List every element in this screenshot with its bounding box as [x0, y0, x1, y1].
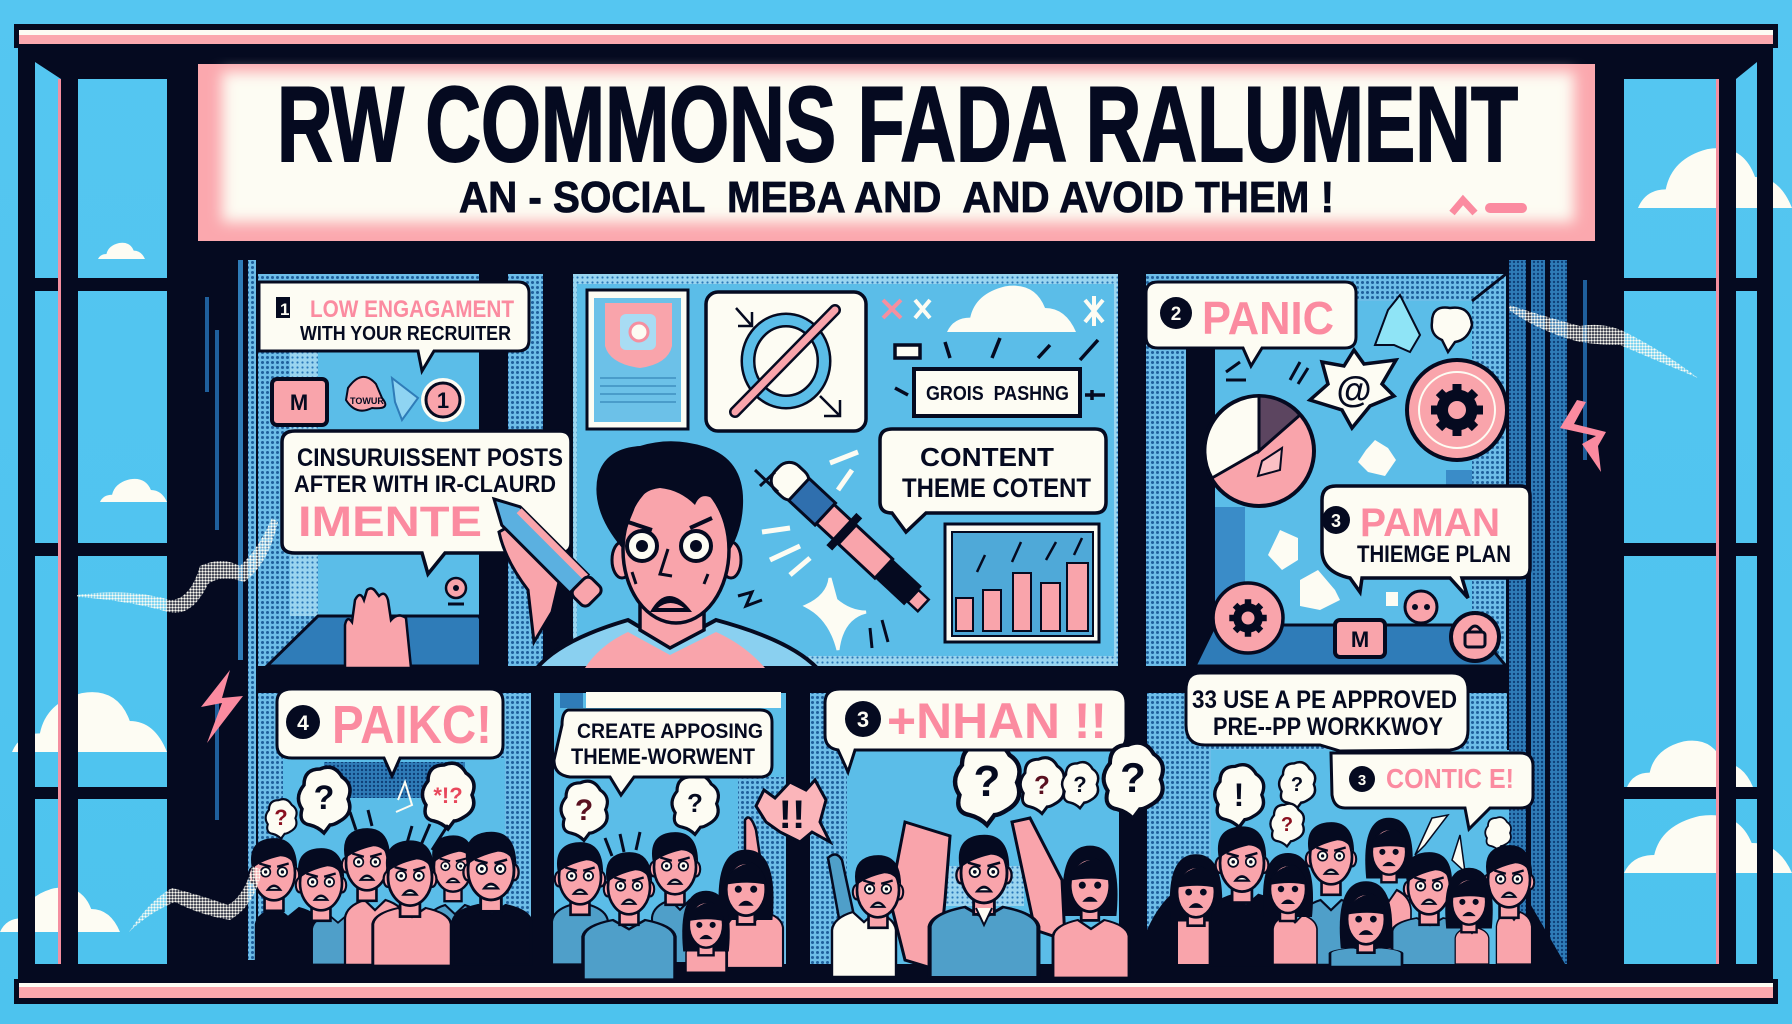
thought bubbles: ?: [1281, 814, 1293, 836]
burst: exclamation: !!: [779, 793, 805, 837]
callout: use a pre-approved: [1186, 673, 1468, 751]
callout: paikc: [277, 689, 503, 776]
callout: create apposing: THEME-WORWENT: [571, 744, 756, 769]
callout: content theme: CONTENT: [920, 442, 1054, 472]
callout: panic: [1146, 282, 1356, 366]
thought bubbles: [955, 743, 1098, 825]
sky clouds: [0, 148, 1792, 932]
thought bubbles: *!?: [433, 783, 463, 808]
icon: small marks: [1268, 440, 1398, 610]
panel: bottom 5: [552, 692, 786, 979]
icon: close marks: [883, 296, 1103, 326]
thought bubbles: ?: [1291, 774, 1303, 796]
burst: exclamation: [756, 780, 830, 842]
callout: low engagement: WITH YOUR RECRUITER: [300, 323, 511, 345]
icon: small target: [446, 578, 466, 604]
callout: low engagement: [259, 282, 529, 371]
icon: at-sign burst: @: [1336, 369, 1372, 410]
callout: panic: 2: [1171, 304, 1181, 325]
icon: poster: [587, 290, 688, 429]
thought bubbles: [266, 763, 474, 839]
callout: use a pre-approved: PRE--PP WORKKWOY: [1213, 713, 1443, 741]
icon: number badge: 1: [437, 388, 449, 413]
icon: swirl: TOWUR: [350, 396, 384, 406]
icon: dots badge: [1405, 591, 1437, 623]
pie chart: [1204, 396, 1314, 506]
callout: low engagement: 1: [280, 300, 289, 319]
lightning: left: [201, 670, 243, 743]
callout: paman plan: 3: [1331, 511, 1341, 531]
icon: cloud: [947, 286, 1076, 332]
callout: paikc: PAIKC!: [332, 695, 492, 755]
callout: inconsistent posts: [282, 431, 571, 574]
icon: swirl: [346, 377, 418, 420]
banner: [198, 64, 1595, 241]
callout: content theme: THEME COTENT: [902, 473, 1091, 503]
figure: panicked person: [537, 441, 817, 668]
thought bubble: panel edge: [1104, 743, 1163, 818]
callout: paman plan: PAMAN: [1360, 501, 1500, 545]
thought bubbles: [1215, 762, 1511, 872]
panel: top left: [258, 274, 571, 668]
icon: M tag: [272, 379, 327, 425]
crowd: [832, 835, 1129, 978]
thought bubbles: ?: [687, 788, 703, 818]
callout: create apposing: [554, 710, 772, 795]
top beam: [14, 24, 1778, 48]
thought bubbles: ?: [575, 794, 593, 827]
thought bubbles: [561, 775, 718, 840]
callout: create apposing: CREATE APPOSING: [577, 720, 763, 743]
thought bubbles: ?: [974, 757, 1000, 806]
thought bubbles: ?: [274, 805, 288, 830]
icon: M tile: [1335, 620, 1385, 657]
smoke wisp: right: [1509, 305, 1698, 378]
callout: low engagement: LOW ENGAGAMENT: [310, 296, 514, 323]
callout: contice: 3: [1358, 772, 1366, 789]
banner mark: [1452, 200, 1522, 213]
callout: inconsistent posts: IMENTE: [298, 498, 482, 546]
icon: raised hand: [345, 588, 411, 668]
raised phone: [890, 822, 950, 970]
side decorative curtains: [205, 260, 1587, 964]
label: grois pashing: [914, 369, 1080, 416]
label: grois pashing: GROIS PASHNG: [926, 383, 1069, 405]
icon: bag badge: [1451, 613, 1499, 661]
crowd: [552, 818, 783, 979]
panel: top right: [1146, 274, 1530, 666]
icon: at-sign burst: [1310, 350, 1396, 428]
icon: pen: [762, 453, 938, 621]
callout: panic: PANIC: [1202, 292, 1334, 344]
icon: scattered marks: [895, 338, 1105, 400]
callout: inconsistent posts: CINSURUISSENT POSTS: [297, 444, 563, 472]
icon: number badge: [421, 378, 465, 422]
callout: nhan: [825, 689, 1126, 772]
icon: small gear badge: [1213, 583, 1283, 653]
raised arm: [1012, 818, 1065, 940]
icon: pencil in hand: [485, 490, 604, 642]
crowd: [249, 810, 531, 966]
callout: nhan: 3: [857, 707, 869, 732]
panel: center: [485, 274, 1118, 668]
bar chart: [945, 524, 1099, 642]
raised arm: left person: [828, 854, 856, 935]
callout: use a pre-approved: 33 USE A PE APPROVED: [1192, 686, 1457, 714]
lightning: right: [1560, 400, 1606, 472]
thought bubbles: !: [1234, 777, 1244, 813]
thought bubbles: ?: [1073, 772, 1087, 797]
icon: M tag: M: [290, 390, 308, 415]
icon: prohibited sign: [706, 292, 866, 431]
callout: content theme: [880, 429, 1106, 532]
thought bubble: panel edge: ?: [1120, 754, 1146, 801]
callout: contice: CONTIC E!: [1386, 763, 1514, 794]
callout: nhan: +NHAN !!: [887, 693, 1107, 749]
smoke wisp: lower: [129, 866, 262, 932]
bottom beam: [14, 979, 1778, 1004]
callout: inconsistent posts: AFTER WITH IR-CLAURD: [294, 471, 556, 498]
panel: bottom 4: [249, 689, 531, 966]
panel: bottom 7: [1147, 673, 1565, 966]
smoke wisp: left: [77, 518, 278, 613]
callout: contice: [1331, 753, 1533, 829]
callout: paman plan: THIEMGE PLAN: [1357, 541, 1511, 568]
panel: bottom 6: [810, 689, 1129, 978]
icon: M tile: M: [1351, 627, 1369, 652]
thought bubbles: ?: [314, 779, 334, 817]
icon: motion sparks: [738, 452, 888, 650]
callout: paikc: 4: [297, 712, 309, 735]
subtitle: AN - SOCIAL MEBA AND AND AVOID THEM !: [459, 173, 1334, 222]
icon: broken marks: [1226, 295, 1472, 384]
thought bubbles: ?: [1034, 770, 1050, 800]
crowd: [1147, 818, 1565, 966]
callout: paman plan: [1322, 486, 1530, 598]
icon: gear badge: [1407, 360, 1507, 460]
